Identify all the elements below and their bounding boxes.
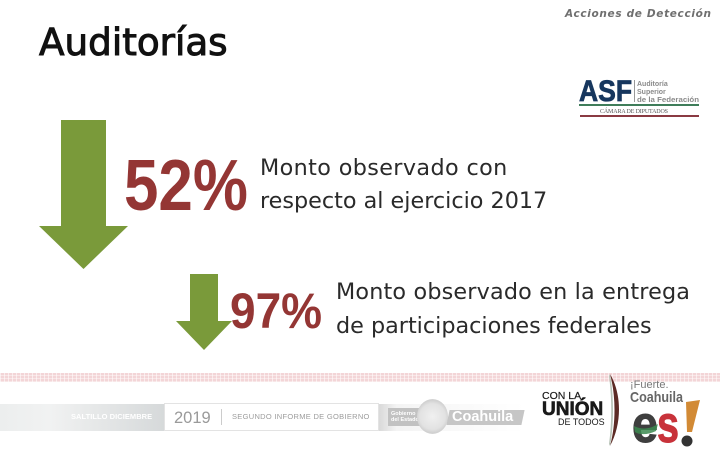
footer government tag <box>388 408 420 426</box>
footer bar <box>0 399 524 434</box>
description: 52%: respecto al ejercicio 2017 <box>260 188 547 214</box>
footer year: 2019 <box>174 409 211 427</box>
logo: Fuerte Coahuila es: ¡Fuerte. <box>630 379 669 391</box>
statistic: 52%: 52% <box>124 146 248 226</box>
footer Coahuila text: Coahuila <box>452 409 513 425</box>
footer white box <box>164 403 379 431</box>
description: 52% <box>260 155 547 214</box>
logo: ASF: CÁMARA DE DIPUTADOS <box>600 107 668 115</box>
logo: ASF: de la Federación <box>637 97 699 104</box>
logo: ASF <box>579 75 699 117</box>
icon: small green down arrow <box>176 274 232 350</box>
footer Coahuila band <box>446 410 525 425</box>
logo: Fuerte Coahuila es <box>630 379 700 448</box>
decorative band <box>0 373 720 382</box>
footer government tag: del Estado <box>391 417 419 423</box>
logo: ASF: ASF <box>579 75 632 108</box>
title: Auditorías <box>39 20 228 64</box>
footer report title: SEGUNDO INFORME DE GOBIERNO <box>232 412 370 421</box>
logo: ASF: Superior <box>637 89 666 96</box>
footer government tag: Gobierno <box>391 411 415 417</box>
icon: large green down arrow <box>39 120 128 269</box>
logo: ASF: Auditoría <box>637 81 668 88</box>
description: 97% <box>336 279 690 339</box>
footer separator <box>221 409 222 425</box>
footer gradient right <box>379 404 525 431</box>
description: 97%: Monto observado en la entrega <box>336 279 690 305</box>
logo: Fuerte Coahuila es: Coahuila <box>630 389 684 406</box>
footer gradient left <box>0 404 164 431</box>
text: union: UNIÓN <box>542 399 603 420</box>
section label: Acciones de Detección <box>565 8 712 20</box>
divider swoosh <box>609 374 619 446</box>
logo: Con la Unión de Todos <box>542 390 605 427</box>
footer seal <box>417 399 448 434</box>
text: de todos: DE TODOS <box>558 417 605 427</box>
description: 52%: Monto observado con <box>260 155 508 181</box>
statistic: 97%: 97% <box>230 283 322 339</box>
footer date: SALTILLO DICIEMBRE <box>71 412 152 421</box>
description: 97%: de participaciones federales <box>336 313 652 339</box>
text: con la: CON LA <box>542 390 581 402</box>
